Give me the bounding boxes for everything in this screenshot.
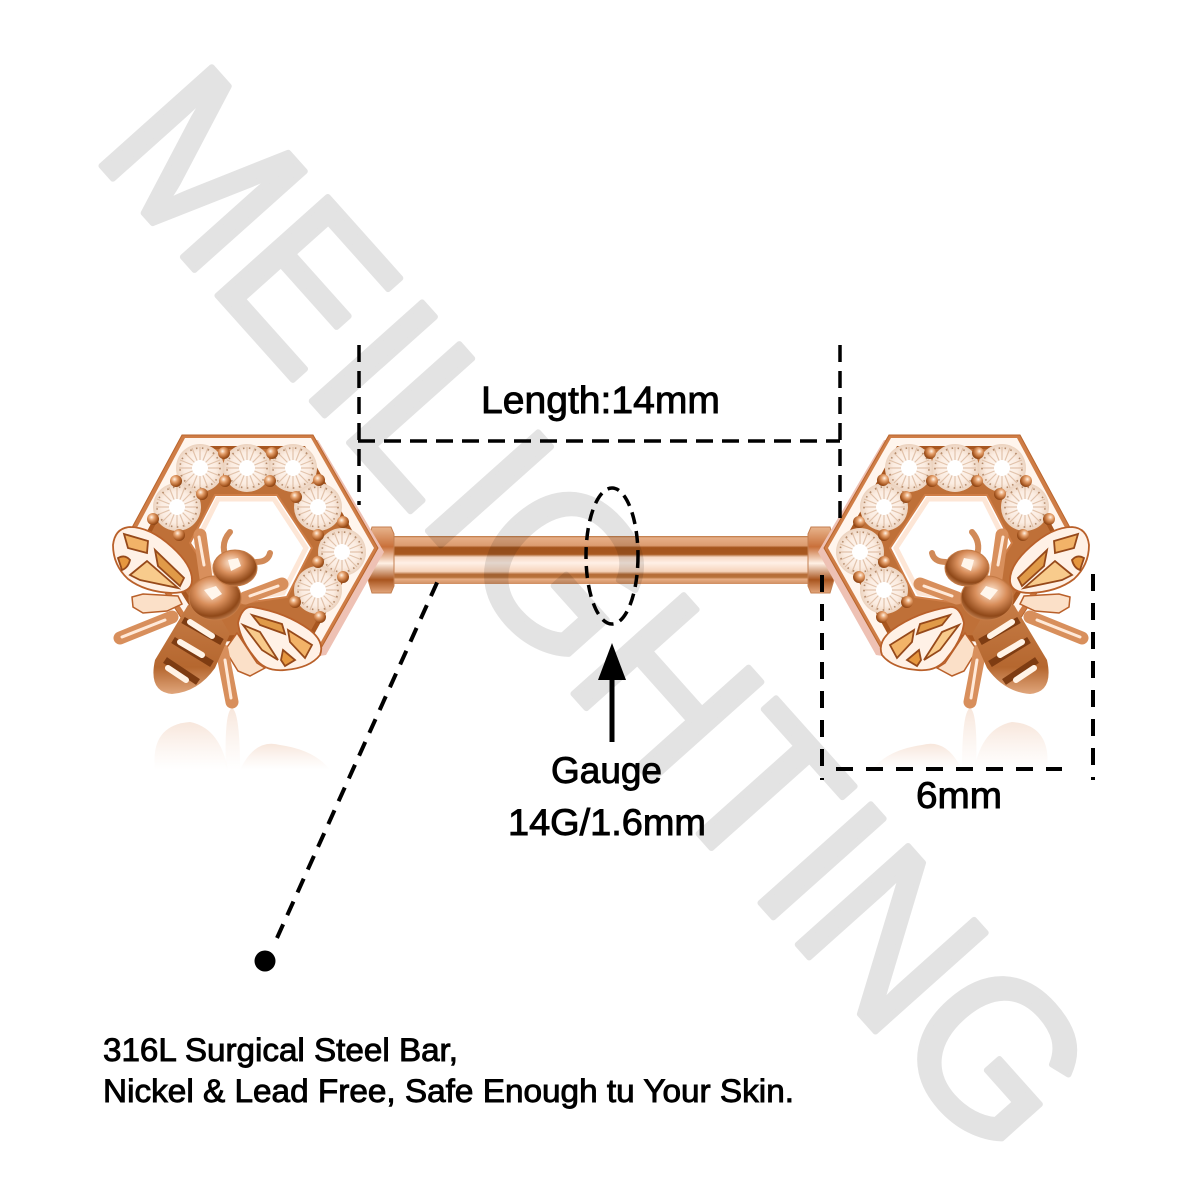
gauge arrow [598, 643, 626, 742]
gauge ellipse [586, 488, 638, 624]
material description [103, 1032, 794, 1109]
barbell shaft [388, 536, 814, 584]
gauge label: Gauge [551, 750, 662, 791]
width label: 6mm [916, 775, 1002, 816]
right ornament: hexagon with bee [808, 435, 1089, 770]
material description: 316L Surgical Steel Bar, [103, 1032, 458, 1068]
gauge label: 14G/1.6mm [508, 802, 706, 843]
gauge label [508, 750, 706, 843]
width dimension lines [822, 574, 1093, 780]
length dimension lines [358, 345, 840, 520]
material leader line [254, 576, 440, 972]
watermark: MEILIGHTING [56, 23, 1141, 1196]
left ornament: hexagon with bee [113, 435, 394, 770]
material description: Nickel & Lead Free, Safe Enough tu Your Skin. [103, 1073, 794, 1109]
length label: Length:14mm [481, 380, 720, 422]
